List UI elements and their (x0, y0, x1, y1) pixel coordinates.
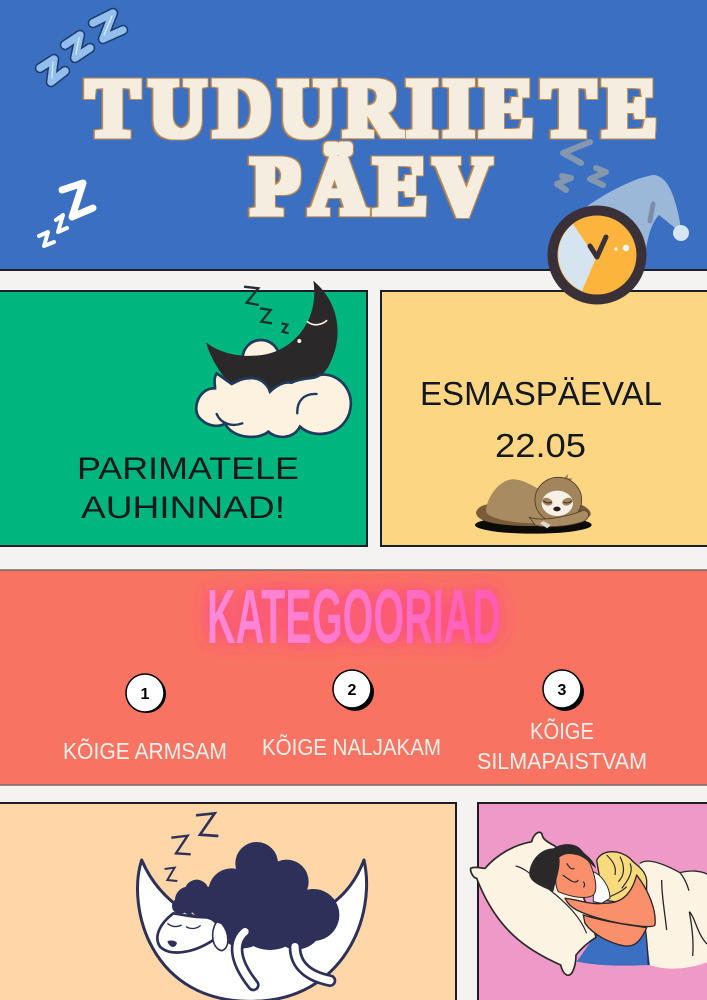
category 1 (63, 674, 227, 764)
text: prizes (77, 450, 299, 525)
category 2: 2 (348, 682, 357, 699)
text: date: 22.05 (495, 427, 586, 464)
category 2: KÕIGE NALJAKAM (262, 733, 441, 760)
title: PÄEV (251, 139, 491, 233)
title (86, 61, 656, 233)
category 3 (477, 670, 647, 774)
text: date (420, 375, 662, 464)
panel: date (381, 291, 707, 546)
category 3: 3 (558, 682, 567, 699)
category 3: SILMAPAISTVAM (477, 748, 647, 774)
category 1: 1 (141, 686, 150, 703)
text: prizes: PARIMATELE (77, 450, 299, 486)
panel: categories (0, 570, 707, 785)
text: date: ESMASPÄEVAL (420, 375, 662, 412)
icon: nightcap (583, 175, 689, 255)
icon: white sleep letters (39, 183, 93, 246)
icon: sleeping sloth (475, 474, 592, 534)
text: prizes: AUHINNAD! (81, 489, 285, 525)
heading: categories (207, 574, 501, 660)
category 1: KÕIGE ARMSAM (63, 737, 227, 764)
icon: clock with nightcap (552, 175, 689, 300)
icon: sheep sleeping on moon (138, 813, 367, 1000)
category 3: KÕIGE (530, 717, 594, 744)
panel: prizes (0, 281, 367, 546)
icon: crescent moon on cloud (196, 281, 351, 437)
panel: header (0, 0, 707, 271)
title: TUDURIIETE (86, 61, 656, 155)
panel: sleeping person (471, 803, 707, 1000)
icon: grey sleep letters (557, 142, 606, 190)
panel: sheep (0, 803, 456, 1000)
icon: light blue sleep letters (40, 13, 123, 82)
category 2 (262, 670, 441, 760)
icon: person sleeping on pillow (471, 832, 707, 975)
